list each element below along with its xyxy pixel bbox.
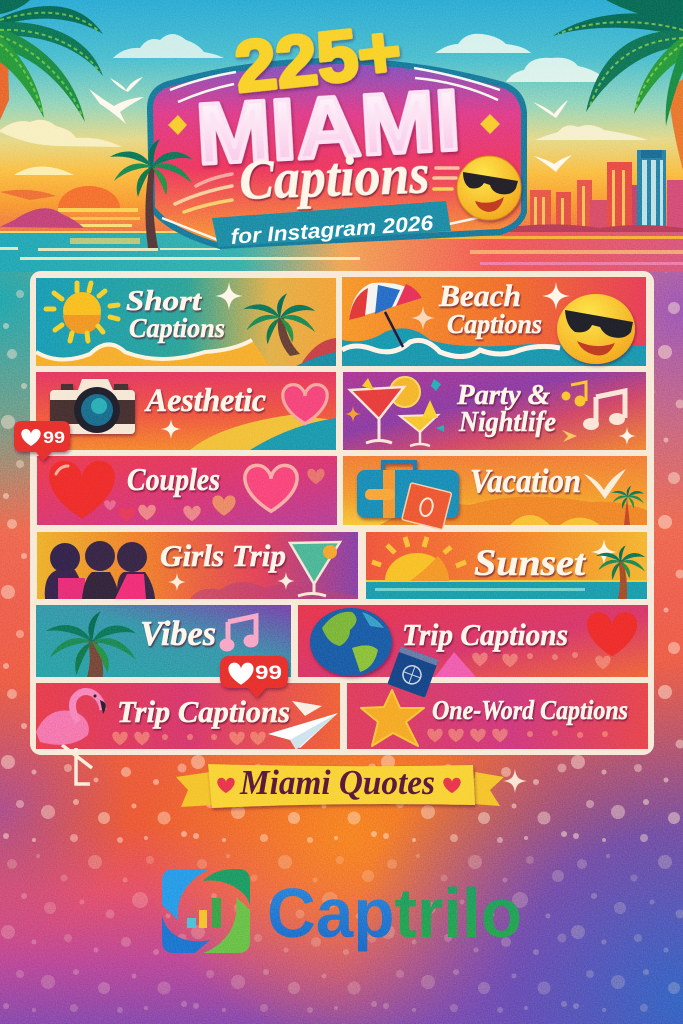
icon: flamingo <box>36 691 106 784</box>
panel: Vibes <box>36 605 291 677</box>
emoji: sunglasses <box>457 156 521 220</box>
panel: Vacation <box>343 456 647 530</box>
ribbon: for Instagram 2026: for Instagram 2026 <box>230 212 434 249</box>
like badge: center <box>220 656 288 698</box>
icon: palm <box>596 545 645 599</box>
confetti <box>345 378 636 445</box>
text: Short <box>126 285 202 317</box>
text: Vibes <box>140 614 216 653</box>
banner: Miami Quotes <box>176 763 504 808</box>
icon: cocktail <box>290 542 340 596</box>
panel: Aesthetic <box>36 372 336 450</box>
icon: paper planes <box>268 701 338 750</box>
panel: Sunset <box>366 532 647 599</box>
text: Trip Captions <box>117 694 290 729</box>
ribbon: for Instagram 2026 <box>212 201 451 249</box>
sparkle <box>161 419 181 439</box>
icon: heart <box>283 385 327 424</box>
text <box>438 278 542 339</box>
wordmark: Captrilo <box>267 874 522 952</box>
like badge: center: 99 <box>255 663 282 684</box>
icon: small palm <box>611 486 644 525</box>
palm tree: top left <box>0 0 103 122</box>
panel: Trip Captions (globe) <box>298 605 648 677</box>
title badge <box>150 11 524 249</box>
icon: music notes <box>562 382 625 430</box>
like badge: left: 99 <box>43 428 65 447</box>
panel: Couples <box>37 456 337 525</box>
text: Beach <box>438 278 521 313</box>
icon: camera <box>50 379 135 434</box>
MIAMI: MIAMI <box>194 72 463 183</box>
panel: One-Word Captions <box>347 683 648 749</box>
small hearts <box>427 729 608 742</box>
sparkle <box>591 539 617 565</box>
Captions: Captions <box>238 143 430 212</box>
icon: globe <box>310 608 392 676</box>
text: Captions <box>129 313 225 343</box>
text <box>456 380 556 438</box>
panel: Short Captions <box>36 278 336 366</box>
225+: 225+ <box>231 11 405 108</box>
sparkle <box>215 282 243 310</box>
small hearts <box>472 652 611 669</box>
logo: Captrilo <box>162 869 522 953</box>
banner: Miami Quotes: Miami Quotes <box>239 763 435 802</box>
icon: passport <box>387 646 439 698</box>
banner hearts <box>217 778 461 793</box>
icon: cocktail glass <box>350 387 404 443</box>
small hearts <box>104 469 325 521</box>
text: Nightlife <box>458 407 556 438</box>
caption grid frame <box>31 272 653 754</box>
small palm in front of badge <box>110 139 192 248</box>
small hearts <box>112 732 266 745</box>
text <box>126 285 225 343</box>
text: Captions <box>447 309 542 339</box>
icon: lemon <box>390 377 420 407</box>
text: Aesthetic <box>144 383 266 419</box>
icon: palm <box>243 293 315 356</box>
text: Trip Captions <box>402 617 568 652</box>
skyline <box>448 150 683 236</box>
icon: palm <box>46 611 136 677</box>
icon: small glass <box>400 415 438 446</box>
sky clouds <box>0 34 648 175</box>
sunset sun and hills <box>0 186 140 228</box>
panel: Party & Nightlife <box>343 372 646 450</box>
icon: umbrella <box>349 283 422 347</box>
speed lines <box>175 168 458 212</box>
text: Sunset <box>474 543 587 584</box>
palm tree: top right <box>553 0 683 170</box>
icon: suitcase <box>357 462 459 518</box>
like badge: left <box>14 421 70 461</box>
icon: check bird <box>584 469 626 499</box>
text: Vacation <box>470 463 581 500</box>
badge frame <box>150 61 524 246</box>
icon: sun <box>372 537 466 581</box>
icon: starfish <box>361 690 424 746</box>
icon: luggage tag <box>402 483 452 530</box>
icon: pink heart <box>245 465 297 511</box>
badge highlight lines <box>162 68 500 240</box>
logo mark <box>162 869 250 953</box>
sparkle near banner <box>503 769 527 793</box>
icon: silhouettes <box>45 541 155 599</box>
icon: heart <box>587 612 637 656</box>
panel: Beach Captions <box>342 277 646 366</box>
icon: sunglasses emoji <box>557 294 635 364</box>
panel: Girls Trip <box>37 532 358 599</box>
text: Party & <box>456 380 550 411</box>
sparkles <box>411 282 570 330</box>
diamonds <box>168 115 187 135</box>
icon: music note <box>222 616 256 649</box>
panel: Trip Captions (flamingo) <box>36 683 340 750</box>
text: Couples <box>127 461 220 497</box>
icon: red heart <box>49 461 115 519</box>
sparkles <box>168 572 295 591</box>
icon: sun <box>46 283 118 341</box>
birds <box>89 77 572 172</box>
text: One-Word Captions <box>432 695 628 725</box>
text: Girls Trip <box>160 538 286 573</box>
water band <box>0 231 683 272</box>
